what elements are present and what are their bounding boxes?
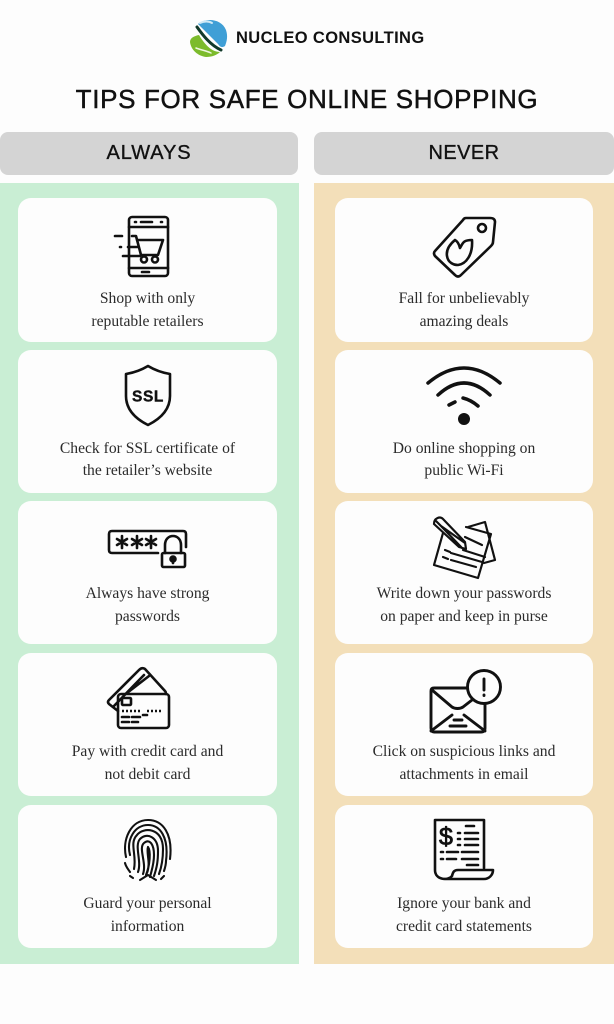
text: credit card statements [396, 918, 532, 934]
text: the retailer’s website [83, 462, 212, 479]
icon: ssl shield: SSL [132, 388, 164, 406]
text: Write down your passwords [377, 585, 551, 602]
title: TIPS FOR SAFE ONLINE SHOPPING [76, 84, 538, 114]
text: Click on suspicious links and [373, 743, 555, 760]
text: Shop with only [100, 290, 195, 307]
icon: credit cards [106, 666, 170, 730]
icon: password and padlock [108, 530, 188, 568]
card: suspicious email [335, 653, 593, 796]
heading: never [314, 132, 614, 175]
panel: never [314, 183, 614, 964]
text: Fall for unbelievably [399, 290, 529, 307]
text: information [111, 918, 184, 934]
text: Do online shopping on [393, 440, 535, 456]
card: credit card [18, 653, 277, 796]
card: public wifi [335, 350, 593, 493]
card: personal information [18, 805, 277, 948]
text: reputable retailers [91, 312, 204, 330]
icon: fingerprint [124, 819, 172, 882]
text: Check for SSL certificate of [60, 440, 235, 456]
icon: phone with shopping cart [114, 216, 170, 278]
icon: envelope with alert [430, 669, 502, 734]
icon: wifi [426, 366, 502, 425]
text [396, 895, 532, 934]
card: unbelievable deals [335, 198, 593, 342]
card: strong passwords [18, 501, 277, 644]
icon: bank statement: $ [439, 823, 453, 851]
icon: ssl shield [124, 364, 172, 426]
text: passwords [115, 608, 180, 624]
text: attachments in email [399, 766, 529, 782]
card: bank statements [335, 805, 593, 948]
text [83, 895, 212, 934]
heading: always [0, 132, 298, 175]
text: Always have strong [86, 585, 209, 602]
text: Ignore your bank and [397, 895, 531, 912]
text: Guard your personal [83, 895, 212, 912]
text: not debit card [105, 766, 190, 782]
text [399, 290, 530, 330]
card: written passwords [335, 501, 593, 644]
text [373, 743, 556, 782]
icon: bank statement [434, 818, 494, 880]
text [86, 585, 210, 624]
text: on paper and keep in purse [380, 608, 548, 624]
heading: never: NEVER [429, 142, 499, 164]
brand name: NUCLEO CONSULTING [236, 29, 425, 47]
text [91, 290, 204, 330]
icon: price tag with flame [432, 216, 496, 278]
card: ssl certificate [18, 350, 277, 493]
text: amazing deals [420, 312, 508, 330]
logo [190, 20, 425, 57]
text [376, 585, 551, 624]
text [393, 440, 536, 479]
text: public Wi-Fi [424, 462, 504, 479]
panel: always [0, 183, 299, 964]
text [60, 440, 236, 479]
icon: pencil and notes [432, 516, 496, 580]
icon: logo globe [190, 20, 228, 57]
heading: always: ALWAYS [106, 142, 192, 164]
card: reputable retailers [18, 198, 277, 342]
text [72, 743, 224, 782]
text: Pay with credit card and [72, 743, 223, 760]
